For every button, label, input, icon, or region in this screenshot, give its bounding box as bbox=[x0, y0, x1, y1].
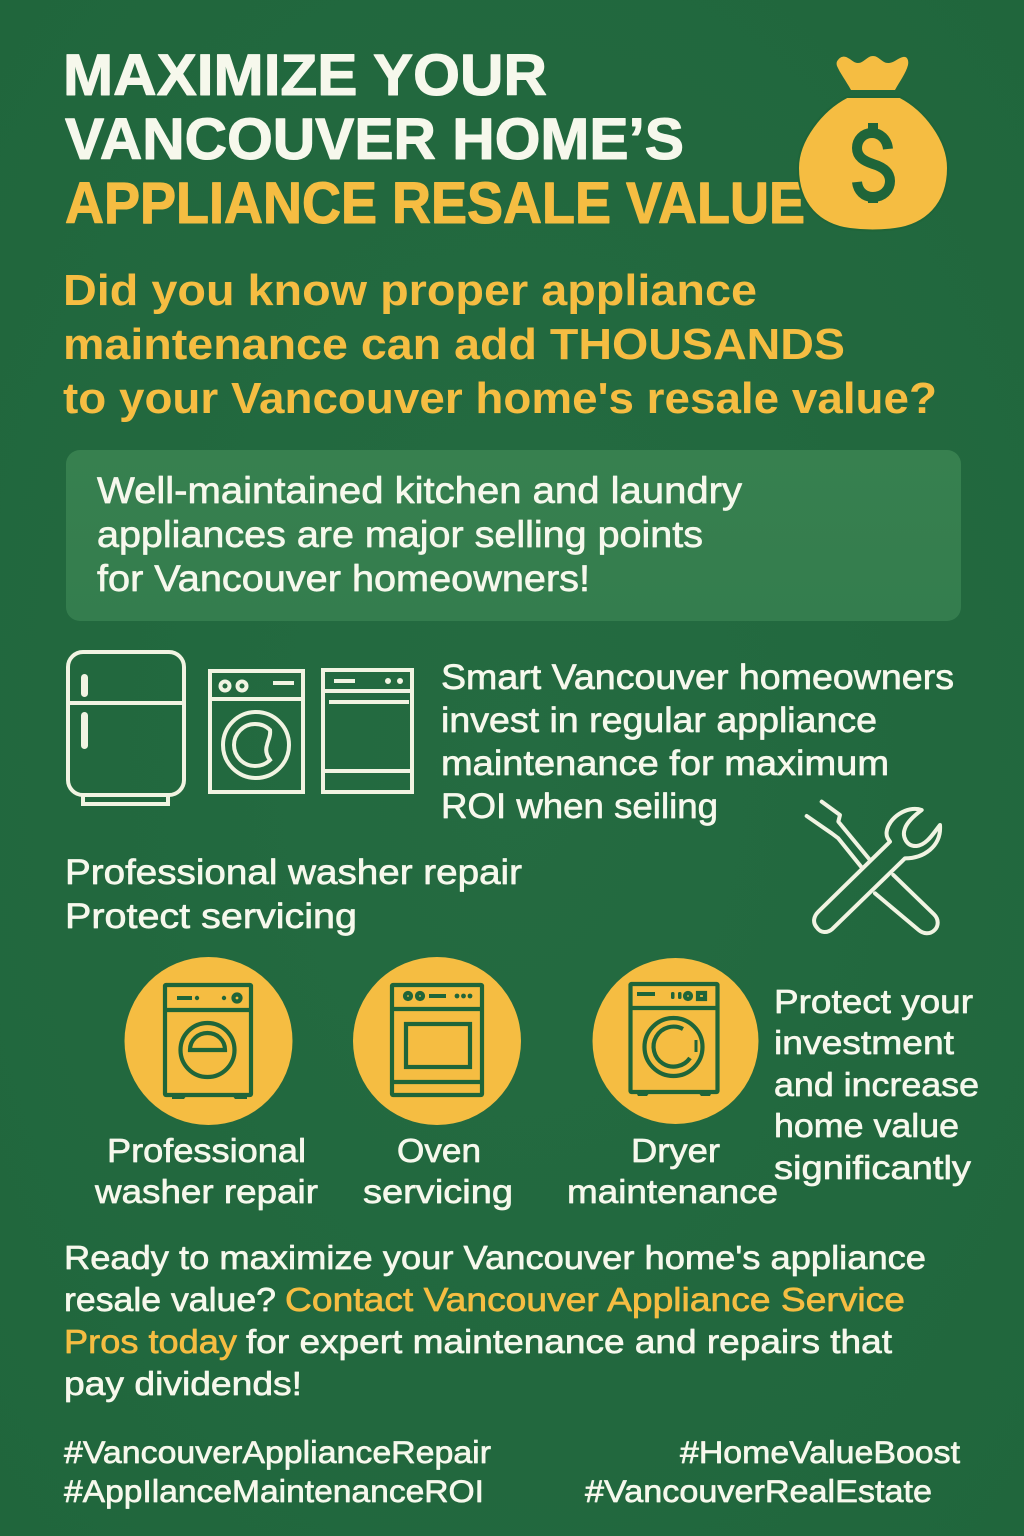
call to action: Pros today bbox=[64, 1324, 237, 1361]
text: protect your investment bbox=[774, 984, 979, 1187]
text: smart homeowners: ROI when seiling bbox=[441, 787, 718, 826]
label: dryer maintenance bbox=[567, 1133, 778, 1211]
text: professional washer repair: Protect servicing bbox=[65, 897, 357, 936]
label: professional washer repair: Professional bbox=[107, 1133, 306, 1170]
call to action: for expert maintenance and repairs that bbox=[246, 1324, 893, 1361]
text: protect your investment: investment bbox=[774, 1025, 955, 1062]
label: professional washer repair: washer repair bbox=[94, 1174, 318, 1211]
label: oven servicing bbox=[363, 1133, 513, 1211]
icon: washer in yellow circle bbox=[124, 957, 292, 1125]
text: smart homeowners bbox=[441, 658, 954, 826]
label: professional washer repair bbox=[94, 1133, 318, 1211]
icon: crossed tools bbox=[807, 802, 940, 933]
call to action bbox=[64, 1240, 926, 1403]
text: protect your investment: home value bbox=[774, 1108, 959, 1145]
icon: oven in yellow circle bbox=[353, 957, 521, 1125]
icon: dishwasher outline bbox=[323, 670, 412, 792]
text: smart homeowners: maintenance for maximum bbox=[441, 744, 889, 783]
title: VANCOUVER HOME’S bbox=[65, 107, 684, 172]
question heading bbox=[63, 266, 937, 423]
icon: dryer in yellow circle bbox=[592, 958, 758, 1124]
text: smart homeowners: Smart Vancouver homeowners bbox=[441, 658, 954, 697]
text: professional washer repair: Professional washer repair bbox=[65, 853, 522, 892]
label: dryer maintenance: Dryer bbox=[631, 1133, 720, 1170]
call to action: Ready to maximize your Vancouver home's appliance bbox=[64, 1240, 926, 1277]
icon: refrigerator bbox=[68, 652, 184, 804]
title: APPLIANCE RESALE VALUE bbox=[65, 171, 805, 236]
label: oven servicing: servicing bbox=[363, 1174, 513, 1211]
icon: washing machine outline bbox=[210, 671, 303, 792]
question heading: to your Vancouver home's resale value? bbox=[63, 374, 937, 423]
call to action: pay dividends! bbox=[64, 1366, 302, 1403]
text: professional washer repair bbox=[65, 853, 522, 936]
hashtags: #HomeValueBoost bbox=[680, 1434, 960, 1470]
question heading: maintenance can add THOUSANDS bbox=[63, 320, 845, 369]
title bbox=[63, 43, 805, 236]
hashtags: #VancouverApplianceRepair bbox=[64, 1434, 491, 1470]
panel: selling points callout bbox=[66, 450, 961, 621]
call to action: resale value? bbox=[64, 1282, 276, 1319]
question heading: Did you know proper appliance bbox=[63, 266, 757, 315]
text: protect your investment: and increase bbox=[774, 1067, 979, 1104]
label: oven servicing: Oven bbox=[397, 1133, 481, 1170]
hashtags bbox=[64, 1434, 960, 1509]
text: protect your investment: Protect your bbox=[774, 984, 973, 1021]
icon: money bag bbox=[798, 56, 948, 230]
label: dryer maintenance: maintenance bbox=[567, 1174, 778, 1211]
hashtags: #VancouverRealEstate bbox=[585, 1473, 932, 1509]
title: MAXIMIZE YOUR bbox=[63, 43, 547, 108]
text: smart homeowners: invest in regular appliance bbox=[441, 701, 877, 740]
call to action: Contact Vancouver Appliance Service bbox=[285, 1282, 905, 1319]
hashtags: #AppIlanceMaintenanceROI bbox=[64, 1473, 484, 1509]
panel: selling points callout: Well-maintained kitchen and laundry bbox=[97, 470, 743, 511]
panel: selling points callout: for Vancouver homeowners! bbox=[97, 558, 590, 599]
panel: selling points callout: appliances are major selling points bbox=[97, 514, 703, 555]
text: protect your investment: significantly bbox=[774, 1150, 971, 1187]
